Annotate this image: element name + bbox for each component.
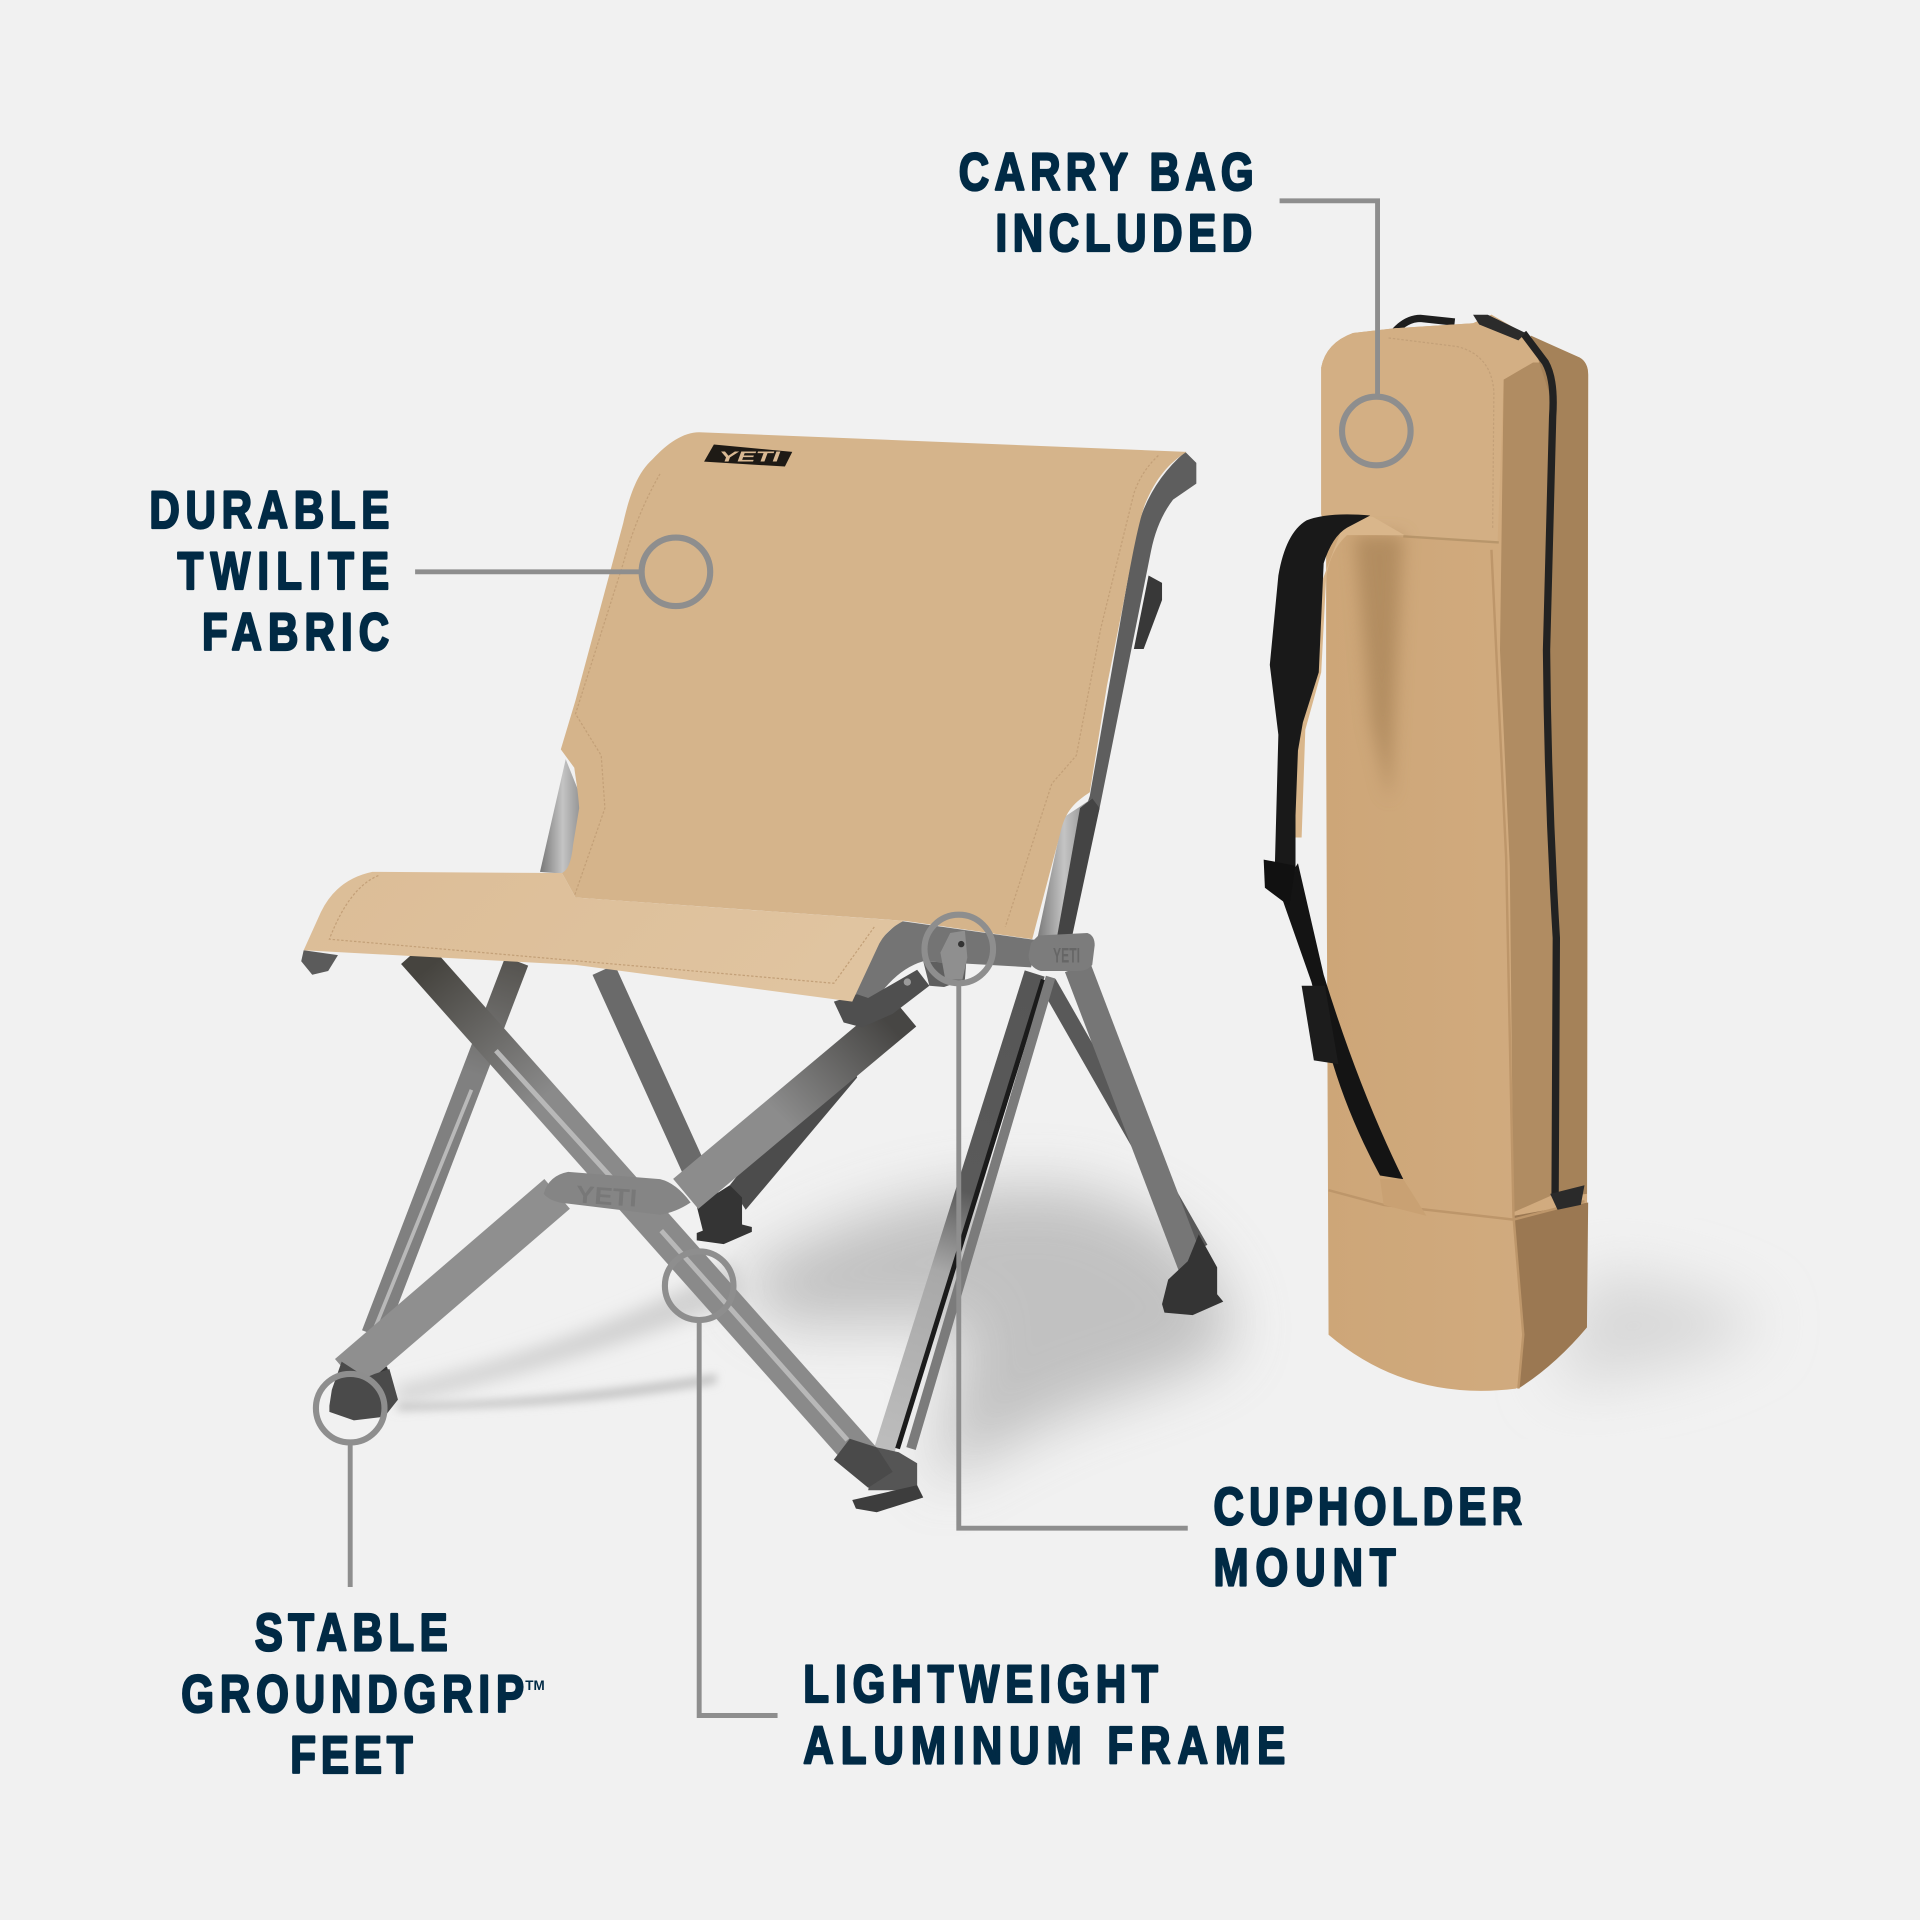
callout: cupholder mount: CUPHOLDER xyxy=(1213,1478,1522,1537)
lower strap xyxy=(1280,863,1403,1179)
base seam xyxy=(1329,1190,1584,1220)
callout: stable groundgrip feet: GROUNDGRIP xyxy=(181,1665,524,1724)
fabric stitching xyxy=(329,456,1158,983)
logo patch xyxy=(704,444,792,467)
seat side bar and clip: YETI xyxy=(1053,944,1080,967)
top cap xyxy=(1321,315,1545,542)
zipper xyxy=(1523,333,1556,1194)
strap tan backing xyxy=(1293,516,1404,838)
callout: lightweight aluminum frame: ALUMINUM FRAME xyxy=(803,1717,1285,1775)
fabric: seat xyxy=(304,872,904,1002)
callout: stable groundgrip feet xyxy=(181,1374,545,1785)
callout: durable twilite fabric: FABRIC xyxy=(202,604,389,662)
floor shadows xyxy=(394,1187,1763,1488)
long cross tube xyxy=(414,953,864,1460)
rear legs xyxy=(373,961,1200,1335)
callout: stable groundgrip feet: STABLE xyxy=(255,1604,448,1663)
front right leg xyxy=(884,973,1051,1451)
second cross tube xyxy=(348,1011,904,1374)
callout: durable twilite fabric: DURABLE xyxy=(149,481,389,540)
strap shadow xyxy=(1354,535,1403,802)
callout: cupholder mount: MOUNT xyxy=(1213,1539,1396,1598)
callout: lightweight aluminum frame xyxy=(665,1251,1285,1775)
callout: cupholder mount xyxy=(924,915,1522,1598)
callout: durable twilite fabric: TWILITE xyxy=(178,543,389,601)
callout: stable groundgrip feet: TM xyxy=(525,1678,545,1693)
front feet xyxy=(329,1362,923,1512)
cap stitching xyxy=(1389,338,1494,529)
seat side bar and clip xyxy=(301,921,1095,1027)
logo patch: YETI xyxy=(719,450,782,466)
strap buckle xyxy=(1264,860,1296,906)
carry bag xyxy=(1264,315,1588,1391)
back frame xyxy=(540,452,1196,949)
front panel seam xyxy=(1491,550,1523,1389)
callout: durable twilite fabric xyxy=(149,481,710,662)
callout: carry bag included: INCLUDED xyxy=(996,205,1252,263)
bag silhouette xyxy=(1321,315,1588,1391)
cross hub xyxy=(544,1172,691,1215)
callout: lightweight aluminum frame: LIGHTWEIGHT xyxy=(803,1656,1158,1714)
callout: carry bag included xyxy=(959,143,1411,465)
cap seam xyxy=(1403,536,1499,542)
top zipper pull xyxy=(1473,315,1526,340)
callout: carry bag included: CARRY BAG xyxy=(959,143,1254,202)
rear feet xyxy=(365,1185,1223,1408)
strap end patch xyxy=(1380,1179,1427,1216)
callout: stable groundgrip feet: FEET xyxy=(290,1727,413,1785)
bottom side xyxy=(1513,1202,1588,1389)
top handle xyxy=(1389,318,1455,339)
strap slider xyxy=(1302,986,1338,1064)
strap black pad xyxy=(1270,514,1370,872)
side panel: zip flap xyxy=(1500,362,1556,1212)
fabric: back xyxy=(561,432,1187,939)
chair xyxy=(301,432,1223,1512)
zipper tab bottom xyxy=(1550,1185,1584,1210)
cross hub: YETI xyxy=(575,1182,638,1213)
side panel: right xyxy=(1531,336,1588,1198)
